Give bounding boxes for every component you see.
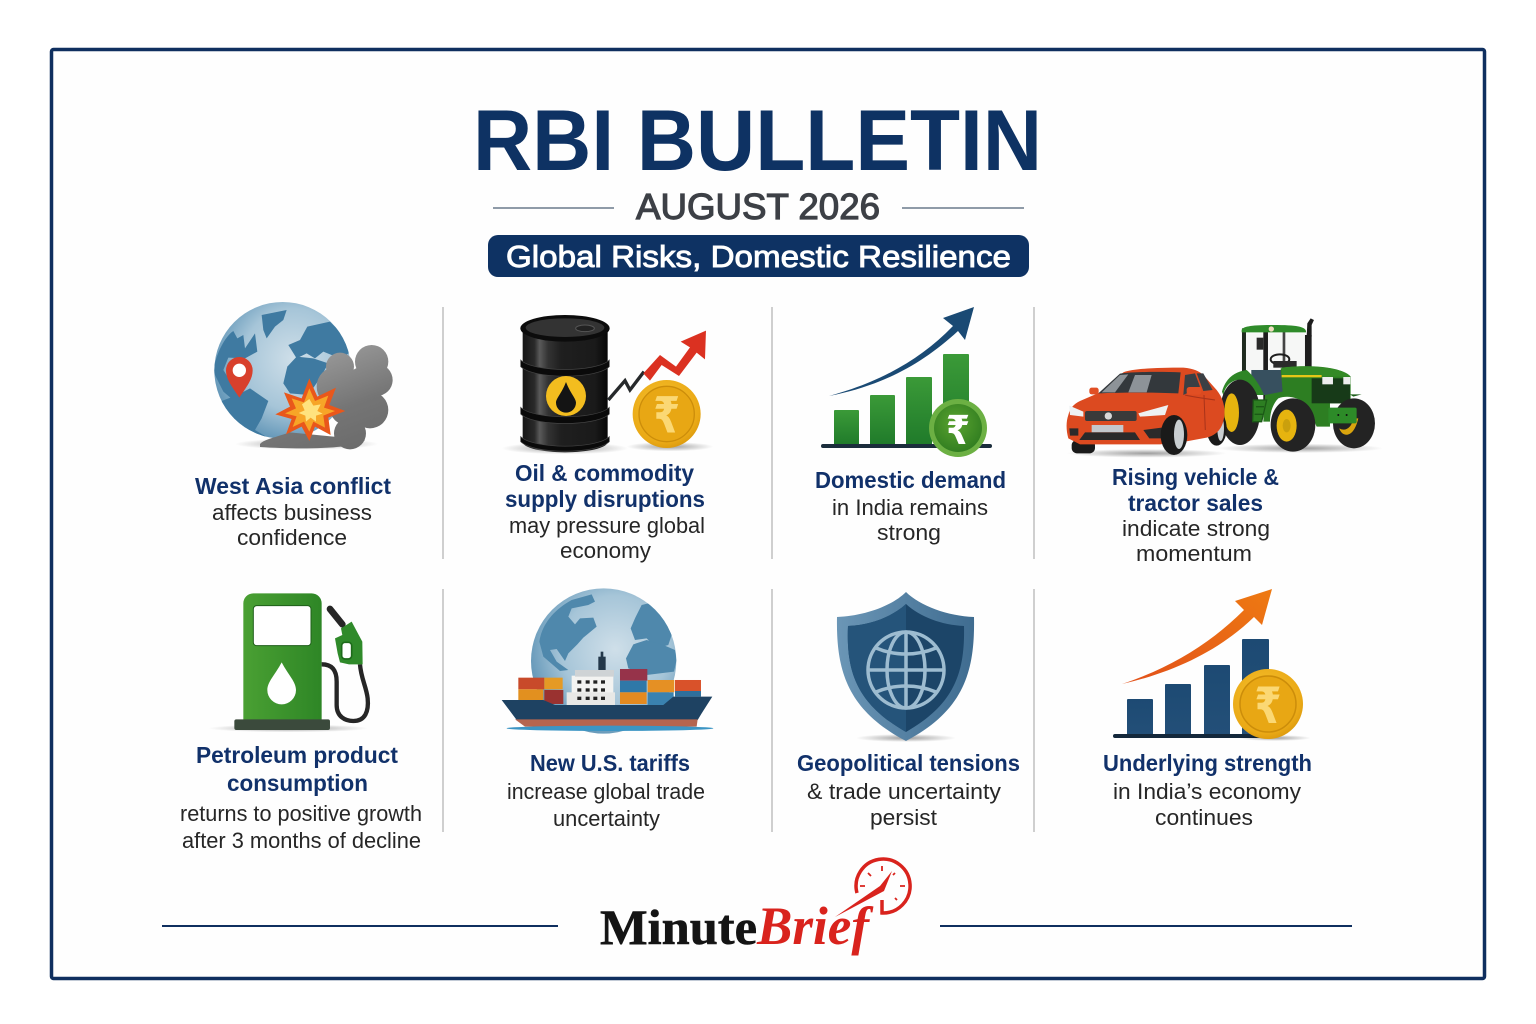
- title: RBI BULLETIN: [473, 93, 1042, 189]
- icon: navy bar chart with orange arrow and coin: ₹: [1254, 677, 1282, 735]
- icon: tractor: [1217, 318, 1383, 453]
- tagline banner: Global Risks, Domestic Resilience: [506, 239, 1011, 274]
- caption: Geopolitical tensions: Geopolitical tensions: [797, 750, 1020, 776]
- icon: oil barrel with price arrow and rupee coin: [502, 315, 713, 454]
- panel: Geopolitical tensions: [797, 592, 1020, 830]
- icon: navy bar chart with orange arrow and coin: [1113, 589, 1311, 741]
- caption: Underlying strength: in India’s economy: [1113, 779, 1301, 804]
- icon: red car: [1067, 368, 1227, 458]
- panel: Domestic demand: [815, 307, 1006, 545]
- caption: Oil and commodity: Oil & commodity: [515, 460, 694, 486]
- caption: New U.S. tariffs: [507, 750, 705, 831]
- caption: Domestic demand: [815, 467, 1006, 545]
- icon: cargo ship with globe: [502, 588, 713, 734]
- logo: MinuteBrief: Brief: [756, 896, 874, 956]
- caption: New U.S. tariffs: increase global trade: [507, 779, 705, 804]
- icon: green bar chart with arrow and rupee coin: ₹: [946, 408, 970, 454]
- subtitle: date: AUGUST 2026: [636, 186, 880, 227]
- logo: MinuteBrief: Minute: [600, 899, 757, 955]
- icon: oil barrel with price arrow and rupee coin: ₹: [653, 387, 680, 445]
- caption: vehicle and tractor sales: momentum: [1136, 541, 1252, 566]
- caption: West Asia conflict: West Asia conflict: [195, 473, 391, 499]
- panel: New U.S. tariffs: [502, 588, 713, 831]
- caption: Oil and commodity: economy: [560, 538, 651, 563]
- panel: Underlying strength: [1103, 589, 1312, 830]
- caption: Domestic demand: Domestic demand: [815, 467, 1006, 493]
- icon: fuel pump: [208, 593, 368, 732]
- panel: Petroleum product consumption: [180, 593, 422, 853]
- caption: West Asia conflict: confidence: [237, 525, 347, 550]
- caption: West Asia conflict: affects business: [212, 500, 372, 525]
- caption: Petroleum product consumption: Petroleum product: [196, 742, 398, 768]
- caption: Underlying strength: Underlying strength: [1103, 750, 1312, 776]
- caption: vehicle and tractor sales: tractor sales: [1128, 490, 1263, 516]
- panel: Oil and commodity: [502, 315, 713, 563]
- panel: West Asia conflict: [195, 302, 393, 550]
- caption: Oil and commodity: may pressure global: [509, 513, 705, 538]
- panel: vehicle and tractor sales: [1067, 318, 1383, 566]
- icon: globe with explosion: [213, 302, 393, 450]
- caption: Petroleum product consumption: after 3 months of decline: [182, 828, 421, 853]
- caption: Underlying strength: continues: [1155, 805, 1253, 830]
- caption: Geopolitical tensions: [797, 750, 1020, 830]
- caption: Domestic demand: strong: [877, 520, 941, 545]
- logo: MinuteBrief: [600, 859, 910, 956]
- caption: Domestic demand: in India remains: [832, 495, 988, 520]
- caption: Petroleum product consumption: consumption: [227, 770, 368, 796]
- caption: vehicle and tractor sales: indicate strong: [1122, 516, 1270, 541]
- caption: vehicle and tractor sales: Rising vehicle &: [1112, 464, 1279, 490]
- caption: Geopolitical tensions: persist: [870, 805, 937, 830]
- caption: Petroleum product consumption: [180, 742, 422, 853]
- caption: New U.S. tariffs: uncertainty: [553, 806, 660, 831]
- caption: New U.S. tariffs: New U.S. tariffs: [530, 750, 690, 776]
- caption: Petroleum product consumption: returns to positive growth: [180, 801, 422, 826]
- icon: shield with globe: [837, 592, 974, 742]
- icon: green bar chart with arrow and rupee coin: [821, 307, 992, 457]
- caption: Geopolitical tensions: & trade uncertainty: [807, 779, 1001, 804]
- caption: vehicle and tractor sales: [1112, 464, 1279, 566]
- caption: West Asia conflict: [195, 473, 391, 550]
- caption: Oil and commodity: [505, 460, 705, 563]
- caption: Oil and commodity: supply disruptions: [505, 486, 705, 512]
- caption: Underlying strength: [1103, 750, 1312, 830]
